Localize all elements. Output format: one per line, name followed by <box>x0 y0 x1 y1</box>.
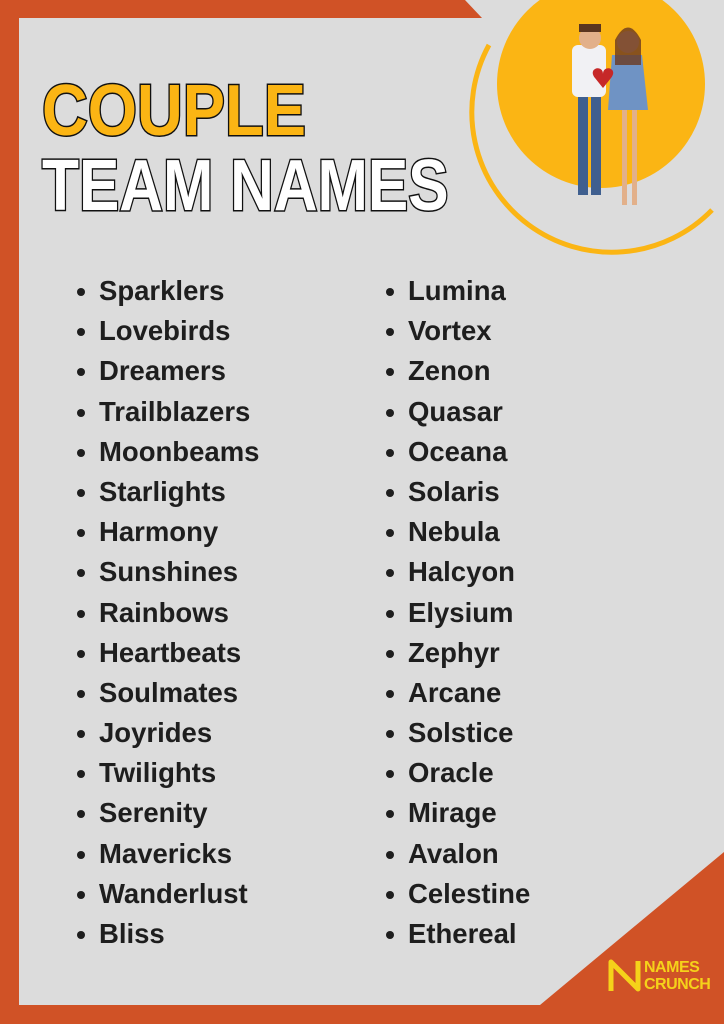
list: column 1: Mavericks <box>99 838 232 869</box>
list: column 1: Bliss <box>99 918 165 949</box>
list: column 2: Mirage <box>408 797 497 828</box>
list: column 1: Serenity <box>99 797 208 828</box>
list: column 1 <box>77 275 259 949</box>
list: column 1: Moonbeams <box>99 436 259 467</box>
list: column 1: Soulmates <box>99 677 238 708</box>
list: column 1: Joyrides <box>99 717 212 748</box>
title: TEAM NAMES <box>42 146 449 226</box>
list: column 1: Rainbows <box>99 596 229 628</box>
list: column 1: Wanderlust <box>99 878 248 909</box>
list: column 1: Twilights <box>99 757 216 788</box>
list: column 2: Nebula <box>408 516 500 547</box>
list: column 2: Zenon <box>408 355 490 386</box>
list: column 2: Zephyr <box>408 637 500 668</box>
logo: Names Crunch: NAMES <box>644 959 699 976</box>
list: column 2: Solstice <box>408 717 513 748</box>
list: column 2: Vortex <box>408 315 492 346</box>
list: column 2: Arcane <box>408 677 501 708</box>
illustration: couple in yellow circle <box>469 0 714 255</box>
list: column 2: Elysium <box>408 596 513 628</box>
list: column 2: Lumina <box>408 275 506 306</box>
list: column 2: Solaris <box>408 476 500 507</box>
list: column 1: Trailblazers <box>99 396 250 427</box>
list: column 2: Oracle <box>408 757 494 788</box>
list: column 2 <box>386 275 530 949</box>
logo: Names Crunch: CRUNCH <box>644 976 710 993</box>
list: column 1: Dreamers <box>99 355 226 386</box>
list: column 2: Halcyon <box>408 556 515 587</box>
list: column 2: Quasar <box>408 396 503 427</box>
list: column 2: Avalon <box>408 838 499 869</box>
list: column 2: Oceana <box>408 436 507 467</box>
list: column 1: Starlights <box>99 476 226 507</box>
list: column 2: Ethereal <box>408 918 517 949</box>
list: column 1: Sunshines <box>99 556 238 587</box>
list: column 1: Harmony <box>99 516 218 547</box>
logo: Names Crunch <box>608 959 710 993</box>
list: column 1: Heartbeats <box>99 637 241 668</box>
list: column 2: Celestine <box>408 878 530 909</box>
title: COUPLE <box>42 71 306 151</box>
list: column 1: Sparklers <box>99 275 224 306</box>
list: column 1: Lovebirds <box>99 315 230 346</box>
title <box>41 71 449 226</box>
